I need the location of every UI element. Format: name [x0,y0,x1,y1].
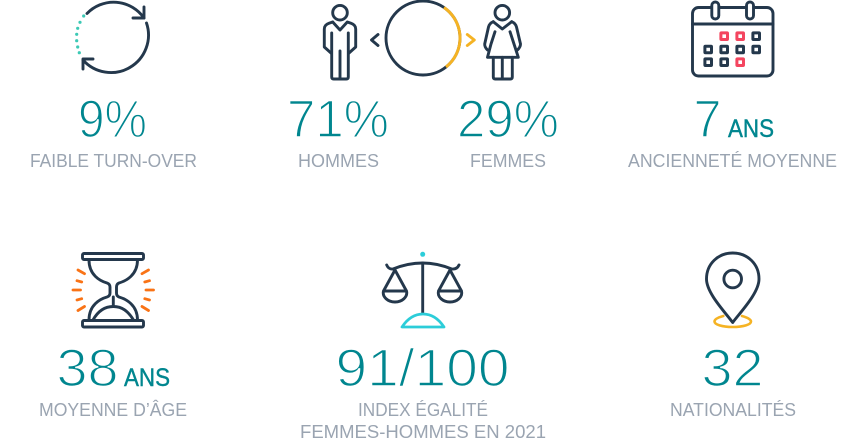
figure: 7 ans: 7 [694,90,722,149]
icon: calendar [692,2,773,76]
panel: nationalities [670,253,796,420]
panel: average age [39,254,187,420]
icon: scales [383,252,462,327]
figure: 38 ans: 38 [56,339,118,398]
icon: woman [485,5,520,79]
figure: 7 ans: ANS [728,115,774,143]
icon: man [324,5,356,79]
icon: hourglass [73,254,154,327]
figure: 71%: 71% [287,90,389,149]
label: femmes: FEMMES [470,150,546,171]
label: moyenne d'âge: MOYENNE D’ÂGE [39,399,187,420]
figure: 7 ans [694,90,774,149]
label: index égalité femmes-hommes en 2021 [300,399,546,442]
icon: location pin [706,253,759,327]
panel: equality index [300,252,546,442]
label: nationalités: NATIONALITÉS [670,399,796,420]
panel: gender split [287,1,559,171]
chart: gender ring [386,1,460,75]
label: hommes: HOMMES [298,150,379,171]
figure: 38 ans: ANS [124,364,170,392]
figure: 29%: 29% [457,90,559,149]
panel: seniority [628,2,837,171]
chevron: women side [467,34,474,46]
figure: 91/100: 91/100 [336,339,510,398]
figure: 32: 32 [702,339,764,398]
label: index égalité femmes-hommes en 2021: FEMMES-HOMMES EN 2021 [300,421,546,442]
label: faible turn-over: FAIBLE TURN-OVER [30,150,197,171]
chevron: men side [372,34,378,46]
panel: turnover [30,2,197,171]
icon: cycle arrows [75,2,148,73]
label: index égalité femmes-hommes en 2021: INDEX ÉGALITÉ [358,399,488,420]
figure: 38 ans [56,339,170,398]
figure: 9%: 9% [78,90,147,149]
label: ancienneté moyenne: ANCIENNETÉ MOYENNE [628,150,837,171]
